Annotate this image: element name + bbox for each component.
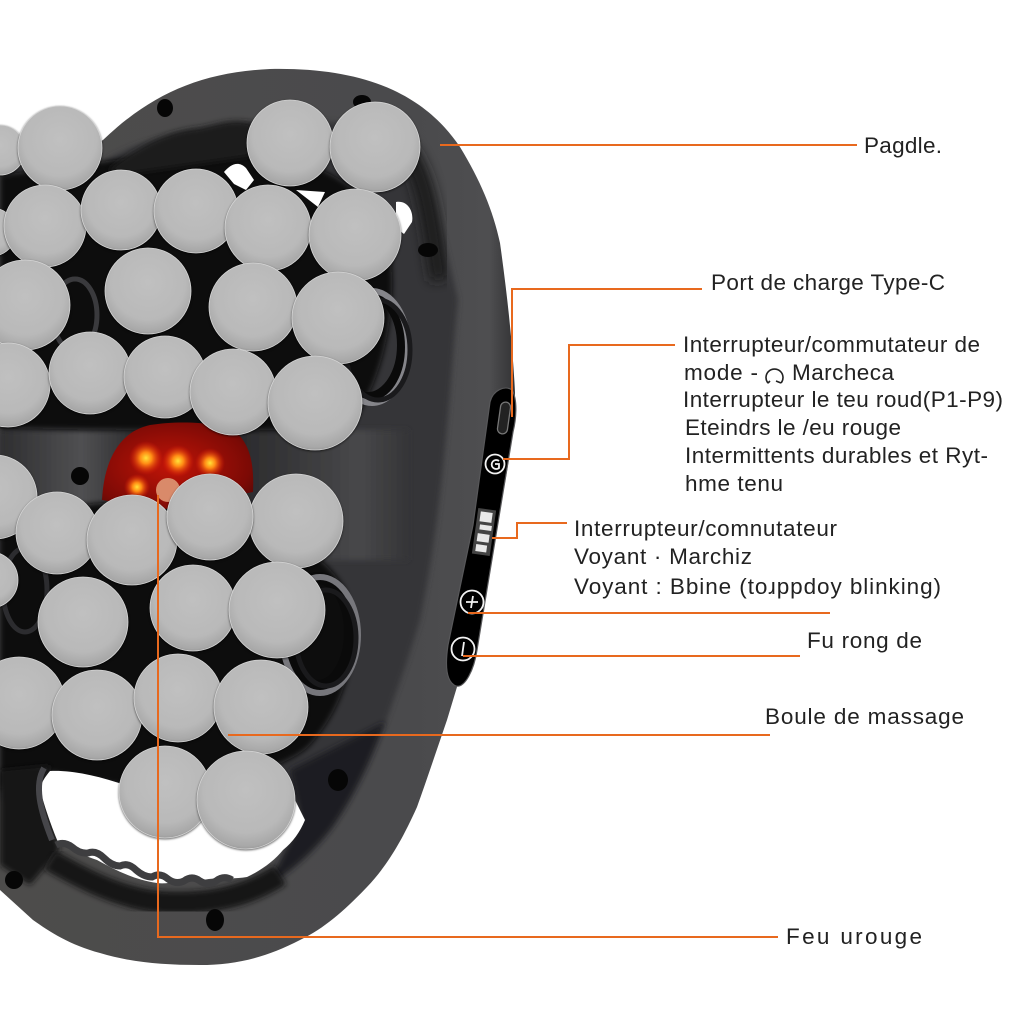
icon: minus button	[452, 638, 474, 660]
icon: plus button	[460, 590, 484, 614]
label: mode switch: Intermittents durables et Ryt-	[685, 443, 988, 468]
label: mode switch: Marcheca	[792, 360, 894, 385]
label: red light: Feu urouge	[786, 924, 922, 949]
massage balls	[0, 100, 420, 849]
label: mode switch: hme tenu	[685, 471, 783, 496]
inner plate	[0, 121, 458, 800]
massager body	[0, 69, 515, 965]
display	[472, 508, 496, 556]
black cluster under balls	[0, 149, 392, 431]
icon: mode button	[486, 454, 504, 474]
handle scallops	[56, 843, 232, 884]
bottom handle bevel	[39, 768, 52, 840]
center strip	[0, 430, 408, 560]
label: indicator switch: Voyant · Marchiz	[574, 544, 752, 569]
red light	[102, 422, 253, 510]
bottom handle window	[41, 771, 305, 883]
label: mode switch: Eteindrs le /eu rouge	[685, 415, 901, 440]
icon: type-c port	[497, 401, 511, 435]
label: indicator switch: Voyant : Bbine (toɹppdoy blinking)	[574, 574, 941, 599]
handle dark band	[50, 860, 280, 903]
control panel	[447, 388, 516, 686]
label: mode switch: Interrupteur le teu roud(P1-P9)	[683, 387, 1003, 412]
label: massage ball: Boule de massage	[765, 704, 964, 729]
label: mode switch: mode -	[684, 360, 758, 385]
label: mode switch	[683, 332, 1003, 496]
dark wedge lower right	[268, 722, 385, 885]
label: mode switch: Interrupteur/commutateur de	[683, 332, 980, 357]
label: paddle: Pagdle.	[864, 133, 942, 158]
top window gaps	[224, 164, 412, 234]
lower left dark	[0, 765, 60, 885]
label: indicator switch	[574, 516, 941, 599]
label: charging port: Port de charge Type-C	[711, 270, 945, 295]
label: indicator switch: Interrupteur/comnutateur	[574, 516, 838, 541]
springs	[3, 279, 410, 693]
dark shade near handle	[405, 150, 440, 280]
label: speed: Fu rong de	[807, 628, 922, 653]
mounting holes	[5, 95, 438, 931]
orange leader lines	[158, 145, 857, 937]
top handle dark wave	[108, 121, 260, 175]
